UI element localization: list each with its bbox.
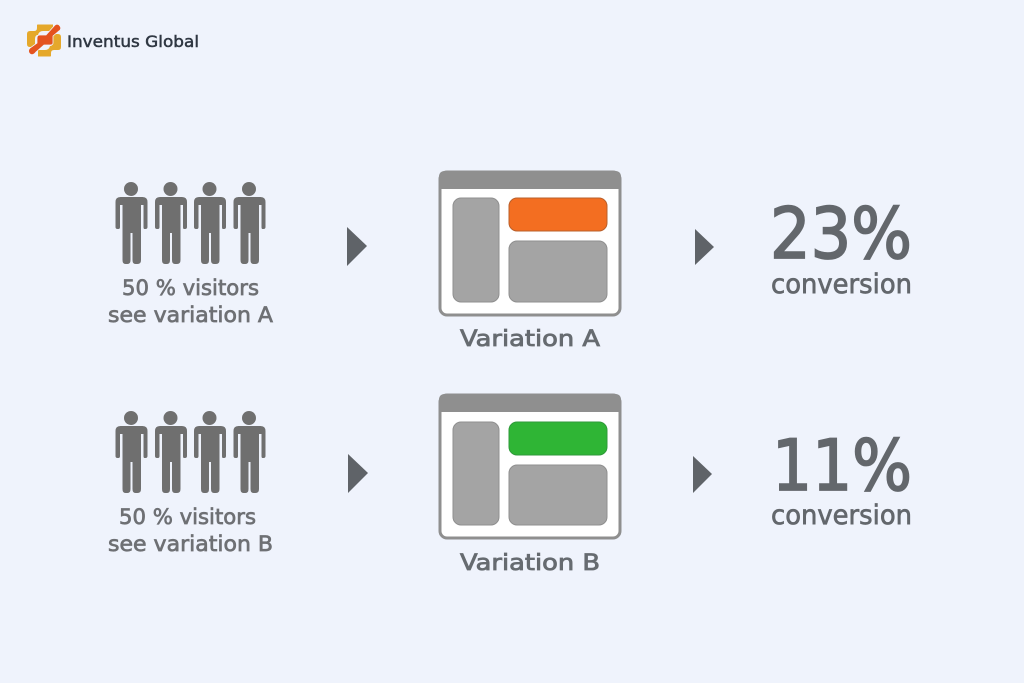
stat: 11% conversion: 11% bbox=[772, 425, 912, 507]
label: Variation A: Variation A bbox=[460, 327, 600, 352]
text: 50 % visitors see variation A: see variation A bbox=[108, 303, 274, 327]
panel: page layout variation B bbox=[439, 394, 621, 538]
orange call-to-action bbox=[509, 198, 607, 231]
logo: Inventus Global bbox=[27, 24, 199, 56]
row: variation B bbox=[108, 394, 912, 576]
arrow A1 bbox=[347, 227, 367, 266]
label: Variation B: Variation B bbox=[460, 551, 600, 576]
arrow B1 bbox=[348, 454, 368, 493]
stat: 23% conversion: 23% bbox=[770, 193, 912, 275]
logo wordmark: Inventus Global bbox=[67, 32, 199, 51]
text: 50 % visitors see variation B: 50 % visitors bbox=[119, 505, 256, 529]
row: variation A bbox=[108, 171, 912, 352]
green call-to-action bbox=[509, 422, 607, 455]
icon: four visitors A bbox=[116, 182, 266, 264]
icon: logo mark bbox=[27, 24, 61, 56]
icon: four visitors B bbox=[116, 411, 266, 493]
text: 50 % visitors see variation B bbox=[108, 505, 273, 556]
text: 50 % visitors see variation A bbox=[108, 276, 274, 327]
text: 50 % visitors see variation A: 50 % visitors bbox=[122, 276, 259, 300]
arrow A2 bbox=[695, 229, 714, 265]
stat: 11% conversion: conversion bbox=[771, 500, 912, 531]
text: 50 % visitors see variation B: see variation B bbox=[108, 532, 273, 556]
panel: page layout variation A bbox=[439, 171, 621, 315]
arrow B2 bbox=[693, 456, 712, 493]
stat: 23% conversion: conversion bbox=[771, 269, 912, 300]
